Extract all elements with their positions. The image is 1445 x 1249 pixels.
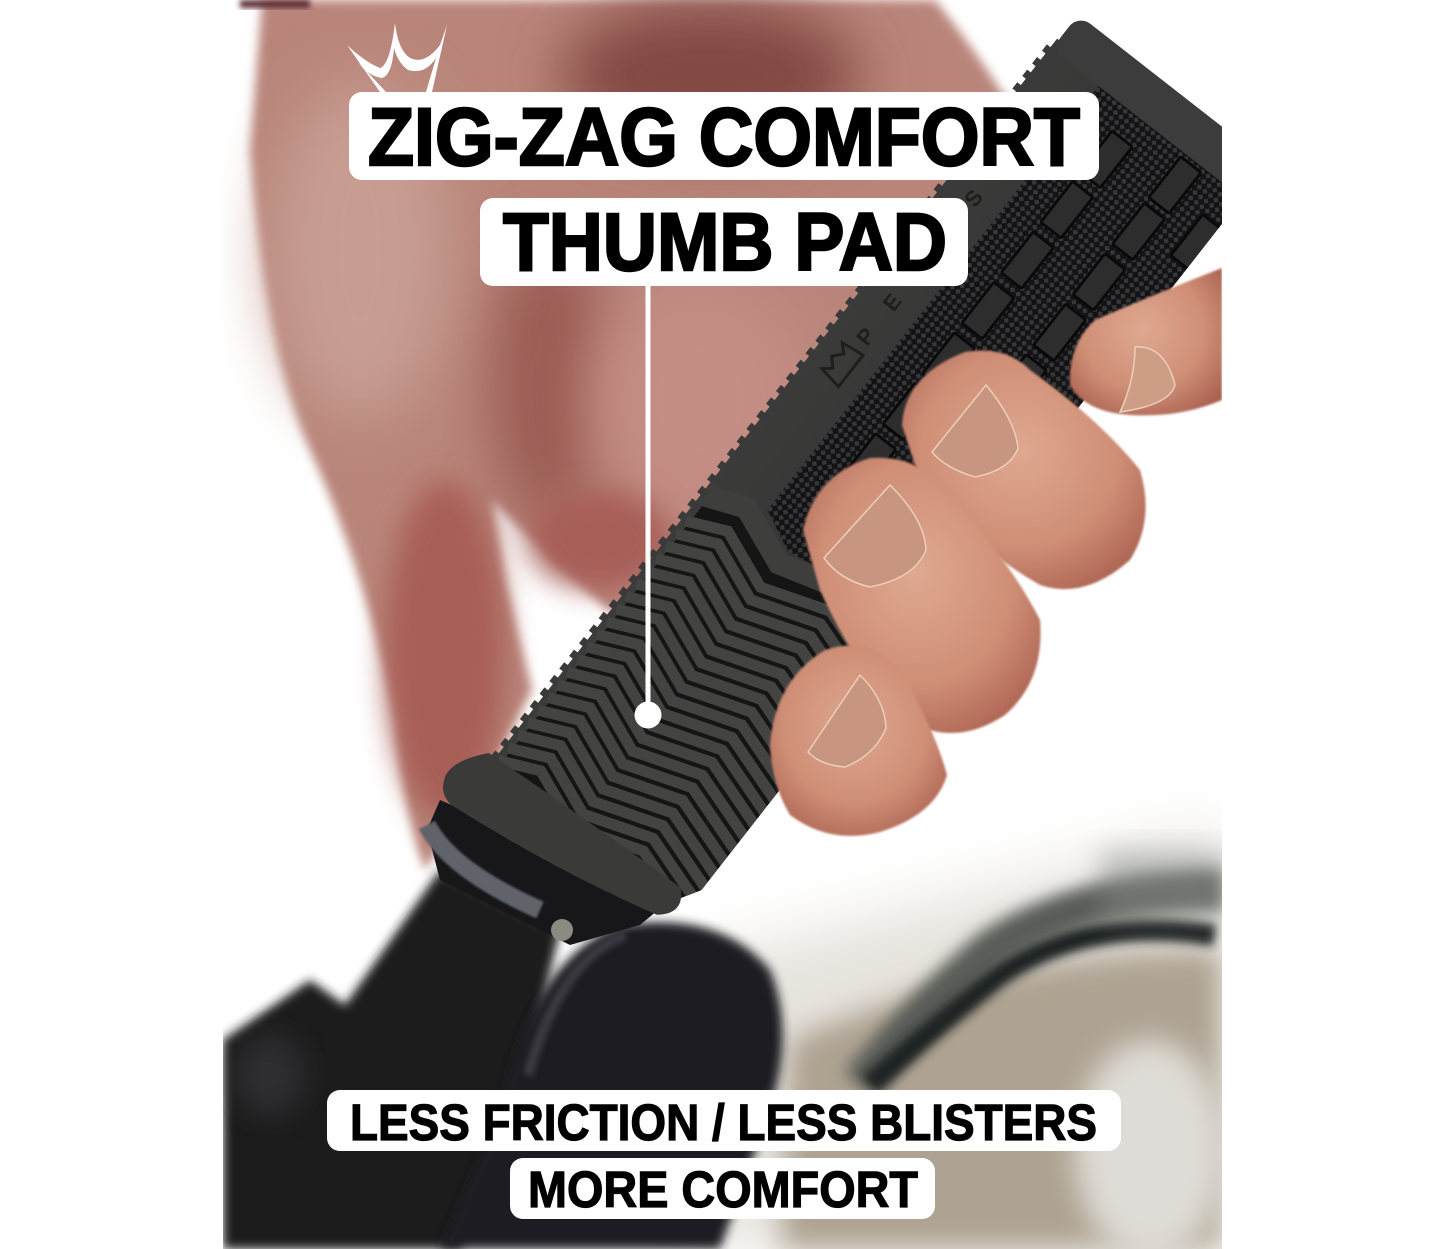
finger 2 xyxy=(902,350,1146,589)
finger 4 xyxy=(770,646,947,836)
edge teeth xyxy=(495,47,1052,760)
zig-zag thumb pad ridges xyxy=(499,485,848,898)
small crown logo on grip xyxy=(820,340,863,387)
benefit label: more comfort: MORE COMFORT xyxy=(528,1161,918,1218)
knurled texture area xyxy=(768,86,1222,564)
blurred palm of hand xyxy=(240,0,1060,870)
brand name on grip: PEAKS xyxy=(851,185,988,350)
photo: hand gripping handlebar xyxy=(223,0,1315,1249)
infographic canvas xyxy=(223,0,1222,1249)
handlebar, bell and controls xyxy=(223,800,782,1249)
background: blurred floor and bike frame xyxy=(700,830,1230,1249)
heading: thumb pad: THUMB PAD xyxy=(503,197,947,288)
grip body with zig-zag and knurl zones xyxy=(491,39,1253,917)
near end flange xyxy=(443,753,682,915)
icon: white crown logo xyxy=(347,23,447,92)
finger 1 xyxy=(1070,268,1222,415)
benefit label: less friction: LESS FRICTION / LESS BLISTERS xyxy=(350,1094,1097,1151)
raised blocks xyxy=(804,130,1220,526)
far end flange xyxy=(1059,20,1222,182)
heading: zig-zag comfort: ZIG-ZAG COMFORT xyxy=(368,92,1080,183)
rubber grip xyxy=(443,20,1222,915)
finger 3 xyxy=(803,458,1041,733)
callout connector line and dot xyxy=(634,280,662,728)
